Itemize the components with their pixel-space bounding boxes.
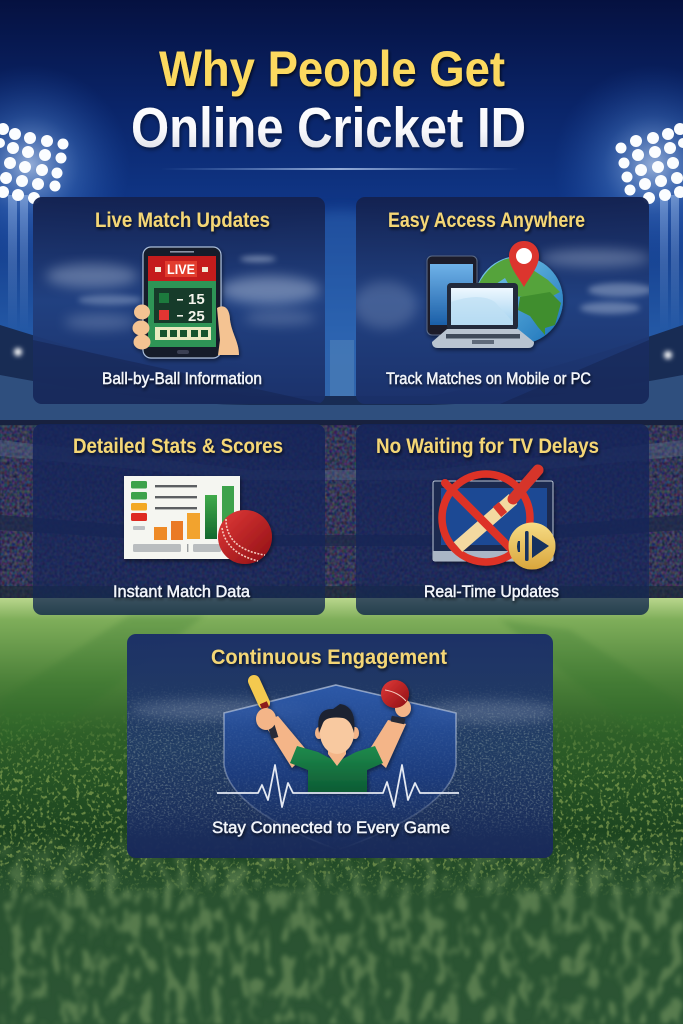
grass field	[0, 598, 683, 1024]
icon: shield behind player	[224, 685, 456, 850]
heading: No Waiting for TV Delays	[376, 435, 599, 458]
floodlights left	[0, 65, 130, 330]
panel: live match updates	[33, 197, 325, 404]
title line 1: Why People Get	[159, 41, 505, 97]
panel: no waiting for tv delays	[356, 424, 649, 615]
title line 2: Online Cricket ID	[131, 96, 526, 160]
heartbeat line	[217, 765, 459, 807]
heading: Continuous Engagement	[211, 646, 447, 669]
heading: Easy Access Anywhere	[388, 209, 585, 232]
caption: Track Matches on Mobile or PC	[386, 369, 591, 388]
stadium roof and stands	[0, 325, 683, 430]
caption: Real-Time Updates	[424, 582, 559, 601]
heading: Live Match Updates	[95, 209, 270, 232]
caption: Ball-by-Ball Information	[102, 369, 262, 388]
heading: Detailed Stats & Scores	[73, 435, 283, 458]
panel: continuous engagement	[127, 634, 560, 858]
icon: stats sheet with cricket ball	[124, 476, 272, 564]
caption: Stay Connected to Every Game	[212, 818, 450, 837]
panel: detailed stats and scores	[33, 424, 325, 615]
icon: celebrating player	[254, 680, 411, 792]
icon: devices and globe	[427, 241, 563, 348]
title	[131, 41, 526, 160]
icon: phone with live score: LIVE	[167, 261, 195, 277]
panel: easy access anywhere	[353, 197, 652, 404]
floodlights right	[553, 65, 683, 330]
caption: Instant Match Data	[113, 582, 251, 601]
icon: phone with live score: 25	[188, 308, 205, 325]
icon: crossed out tv with bat and play button	[433, 470, 556, 570]
icon: phone with live score	[132, 247, 239, 358]
icon: phone with live score: 15	[188, 291, 205, 308]
